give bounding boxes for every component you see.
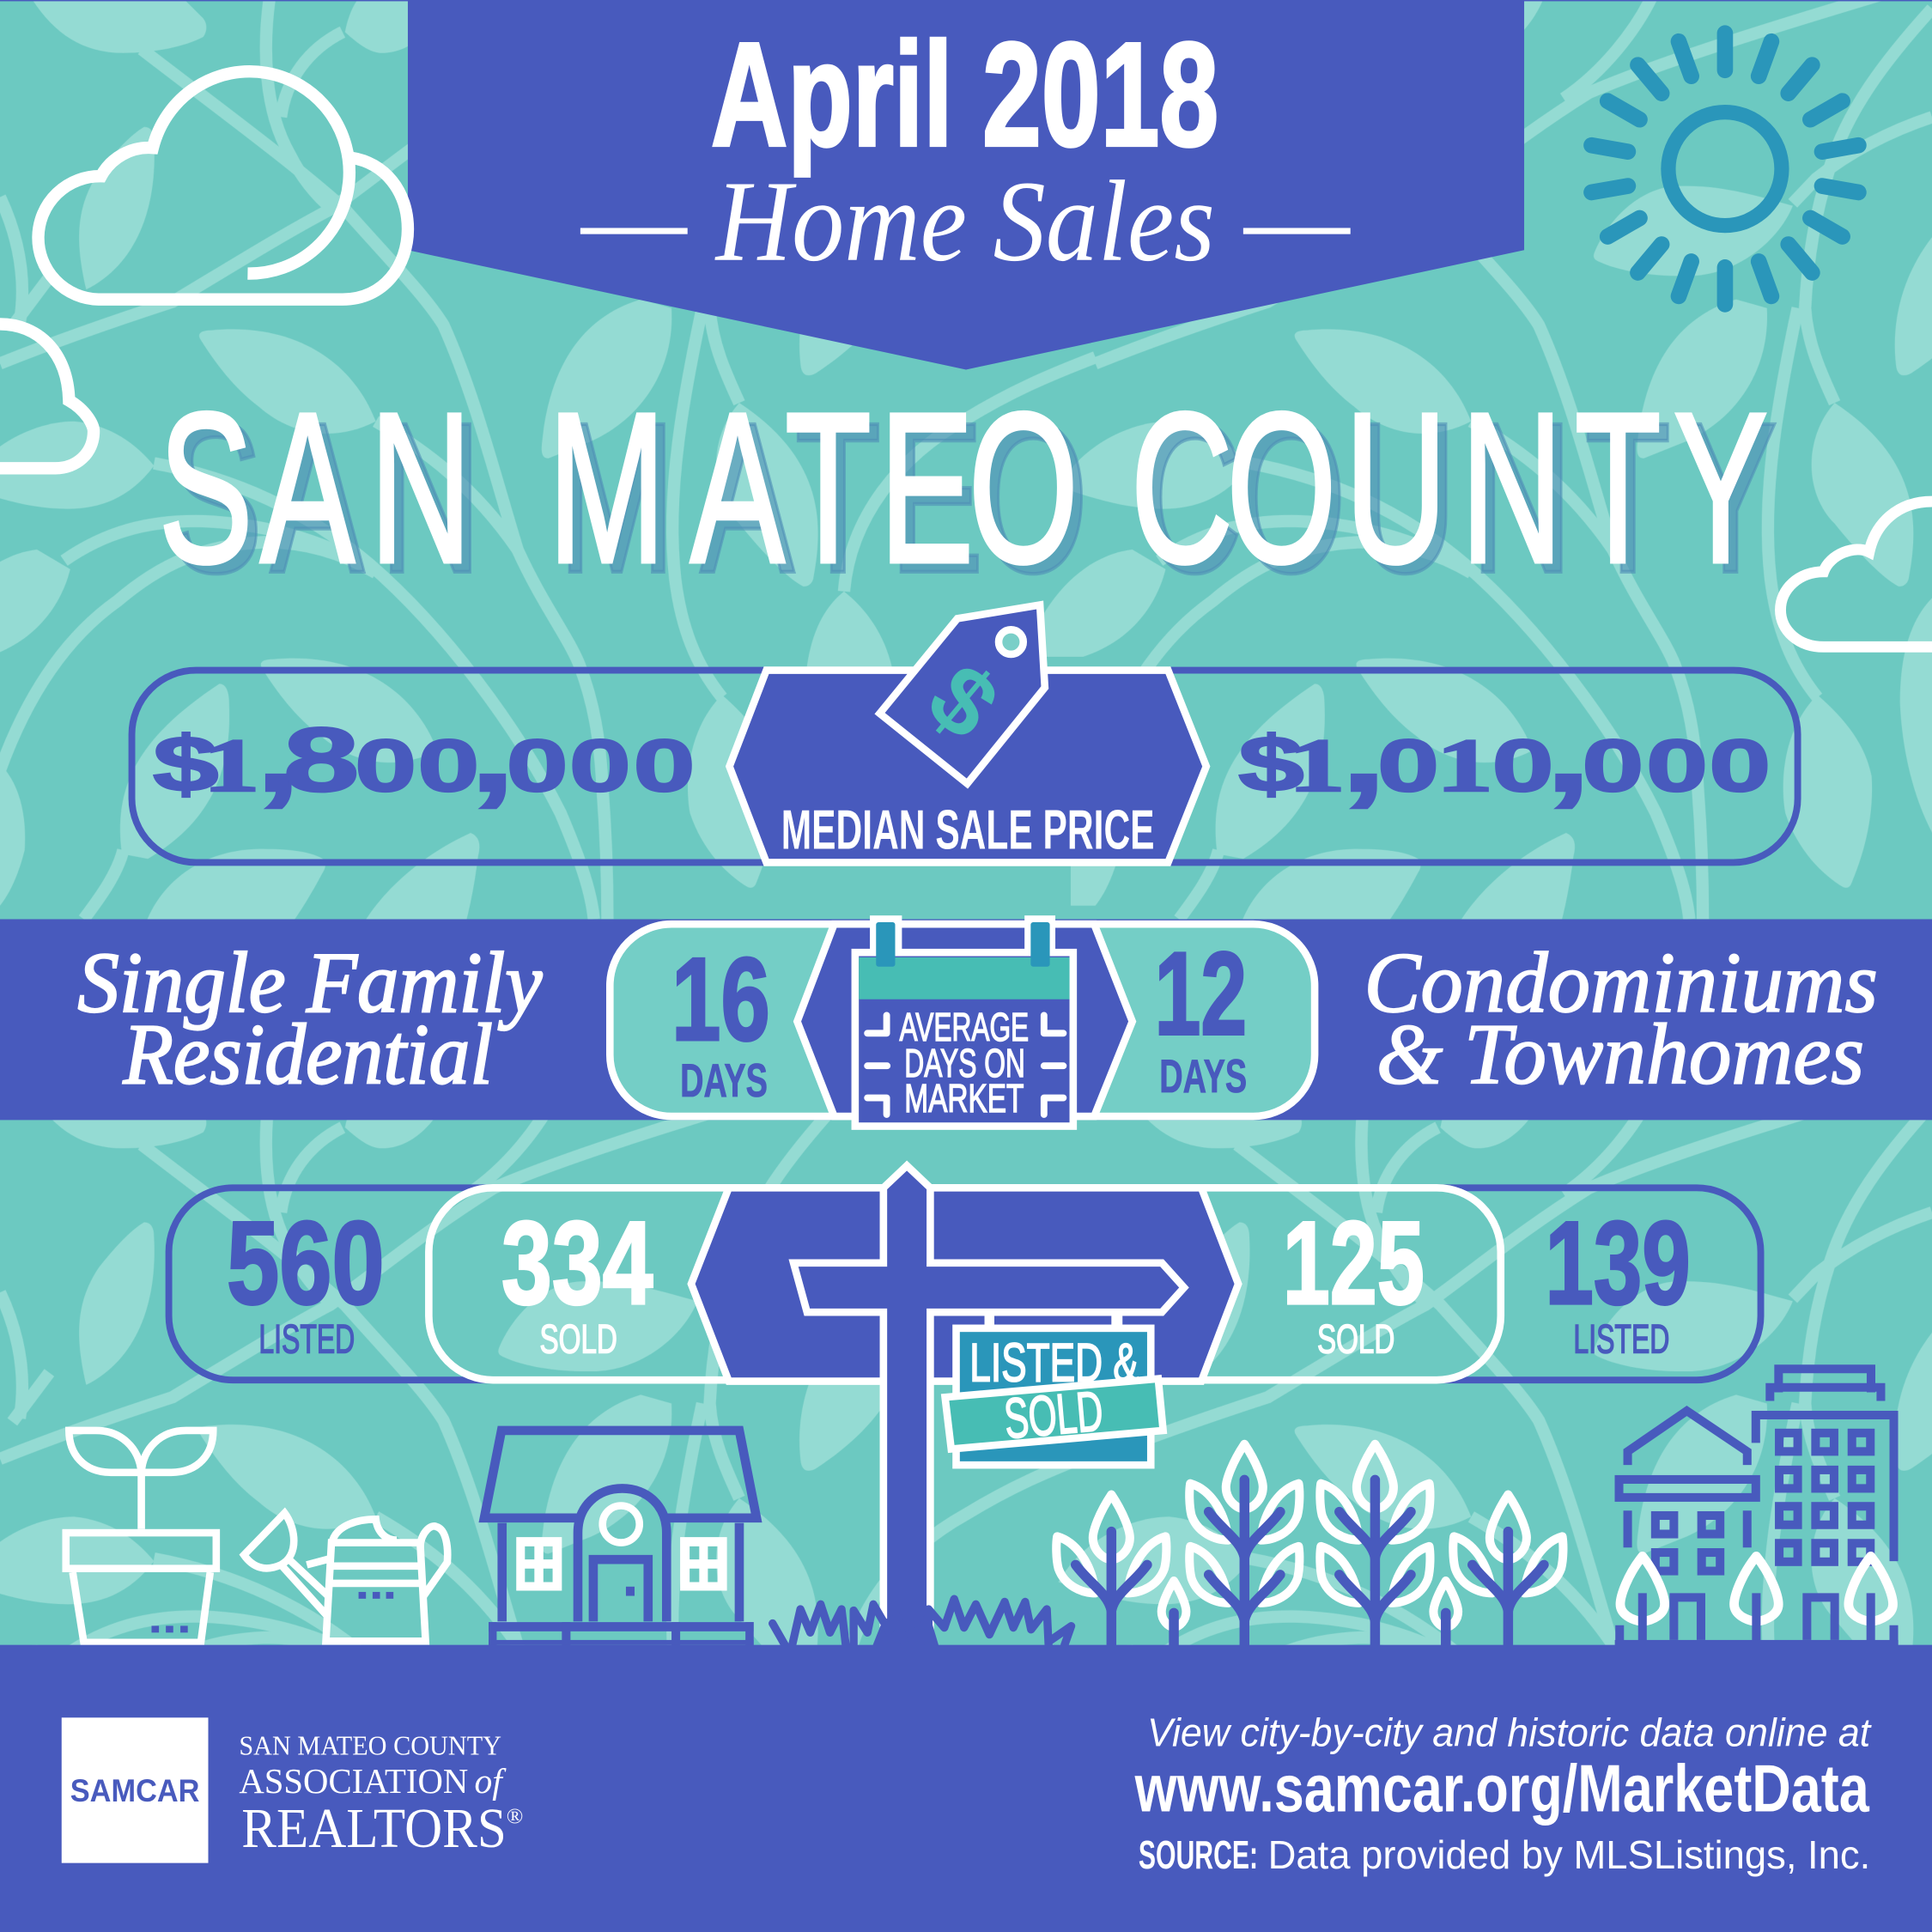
value: condo median price: 0 — [1377, 725, 1439, 807]
value: condo median price: 1 — [1288, 723, 1346, 808]
title banner — [408, 0, 1524, 369]
value: condo median price: 0 — [1492, 725, 1553, 807]
logo: SAMCAR — [62, 1717, 209, 1863]
panel: days on market pill — [610, 924, 1315, 1116]
panel: listed and sold hexagon — [691, 1188, 1238, 1382]
panel: middle band — [0, 919, 1932, 1120]
icon: potted seedling — [66, 1431, 216, 1643]
value: condo median price: 1 — [1436, 723, 1493, 808]
value: single family median price: 0 — [569, 725, 631, 807]
panel: days on market hexagon — [797, 924, 1133, 1116]
value: condo median price: 0 — [1582, 725, 1643, 807]
panel: median sale price hexagon — [729, 671, 1206, 862]
value: 334 sold: SOLD — [540, 1317, 617, 1363]
value: 16 days: 16 — [671, 933, 770, 1066]
logo text: association name: REALTORS — [241, 1797, 507, 1860]
value: single family median price: 0 — [417, 725, 479, 807]
icon: price tag — [880, 605, 1045, 784]
panel: listed outline pill — [169, 1188, 1761, 1380]
value: single family median price: , — [255, 690, 301, 815]
label: average days on market: DAYS ON — [904, 1041, 1025, 1085]
label: median sale price: MEDIAN SALE PRICE — [781, 799, 1155, 861]
label: average days on market: MARKET — [904, 1076, 1024, 1121]
label: single family residential: Single Family — [77, 934, 543, 1030]
icon: grass — [773, 1599, 1072, 1646]
logo text: association name: ® — [507, 1804, 523, 1829]
logo text: association name: of — [474, 1762, 507, 1801]
logo text: association name — [239, 1730, 523, 1860]
value: single family median price: 8 — [283, 708, 360, 811]
label: condominiums and townhomes — [1364, 934, 1878, 1102]
value: single family median price: 0 — [355, 725, 416, 807]
text block: view data online: View city-by-city and historic data online at — [1147, 1710, 1872, 1754]
icon: listed and sold hanging sign: SOLD — [1001, 1378, 1105, 1450]
label: average days on market: AVERAGE — [900, 1005, 1029, 1049]
icon: watering can — [244, 1513, 447, 1641]
value: 125 sold: SOLD — [1317, 1317, 1394, 1363]
panel: sold outline pill — [428, 1188, 1501, 1380]
subtitle dash right — [1243, 228, 1351, 234]
value: condo median price: , — [1340, 690, 1387, 815]
label: condominiums and townhomes: Condominiums — [1364, 934, 1878, 1030]
value: 560 listed: LISTED — [258, 1317, 355, 1363]
value: condo median price: 0 — [1646, 725, 1708, 807]
value: 139 listed: 139 — [1545, 1197, 1691, 1329]
value: 139 listed — [1545, 1197, 1691, 1363]
value: single family median price: 1 — [203, 723, 260, 808]
value: 560 listed: 560 — [227, 1197, 385, 1329]
icon: calendar — [855, 915, 1073, 1127]
value: 12 days: 12 — [1155, 928, 1247, 1060]
value: 139 listed: LISTED — [1573, 1317, 1669, 1363]
label: condominiums and townhomes: & Townhomes — [1376, 1005, 1864, 1102]
text block: source: SOURCE: — [1139, 1832, 1258, 1877]
heading: San Mateo County: SAN MATEO COUNTY — [159, 368, 1768, 607]
value: 560 listed — [227, 1197, 385, 1363]
heading: San Mateo County: SAN MATEO COUNTY — [168, 378, 1777, 617]
value: 16 days — [671, 933, 770, 1107]
icon: left cloud — [0, 324, 94, 468]
title: April 2018: April 2018 — [711, 12, 1218, 177]
logo text: association name: ASSOCIATION — [239, 1762, 468, 1801]
value: single family median price: 0 — [507, 725, 568, 807]
logo text: association name: SAN MATEO COUNTY — [239, 1730, 501, 1760]
icon: signpost — [793, 1165, 1184, 1651]
value: single family median price: 0 — [634, 725, 695, 807]
icon: house — [484, 1431, 756, 1645]
panel: median sale price outline — [132, 671, 1798, 862]
value: 12 days: DAYS — [1159, 1050, 1247, 1103]
value: 16 days: DAYS — [680, 1054, 768, 1107]
value: 334 sold — [501, 1197, 653, 1363]
value: 12 days — [1155, 928, 1247, 1103]
value: single family median price: $ — [153, 720, 219, 808]
value: 334 sold: 334 — [501, 1197, 653, 1329]
icon: condo buildings — [1615, 1369, 1899, 1646]
logo: SAMCAR: SAMCAR — [70, 1772, 200, 1808]
value: condo median price: $ — [1238, 720, 1304, 808]
subtitle: Home Sales: Home Sales — [714, 158, 1215, 286]
icon: right cloud — [1781, 501, 1932, 647]
icon: listed and sold hanging sign — [945, 1314, 1163, 1465]
panel: footer — [0, 1645, 1932, 1932]
icon: listed and sold hanging sign: LISTED & — [969, 1334, 1139, 1394]
value: single family median price: , — [470, 690, 516, 815]
icon: plants — [1056, 1444, 1563, 1645]
label: single family residential — [77, 934, 543, 1102]
label: average days on market — [900, 1005, 1029, 1121]
value: 125 sold: 125 — [1283, 1197, 1425, 1329]
icon: large cloud — [39, 71, 408, 300]
text block: source: Data provided by MLSListings, Inc. — [1268, 1832, 1870, 1877]
value: condo median price: , — [1545, 690, 1591, 815]
icon: sun — [1591, 33, 1858, 304]
label: single family residential: Residential — [123, 1005, 493, 1102]
value: 125 sold — [1283, 1197, 1425, 1363]
icon: price tag: $ — [908, 643, 1018, 760]
value: condo median price: 0 — [1709, 725, 1771, 807]
subtitle dash left — [580, 228, 688, 234]
